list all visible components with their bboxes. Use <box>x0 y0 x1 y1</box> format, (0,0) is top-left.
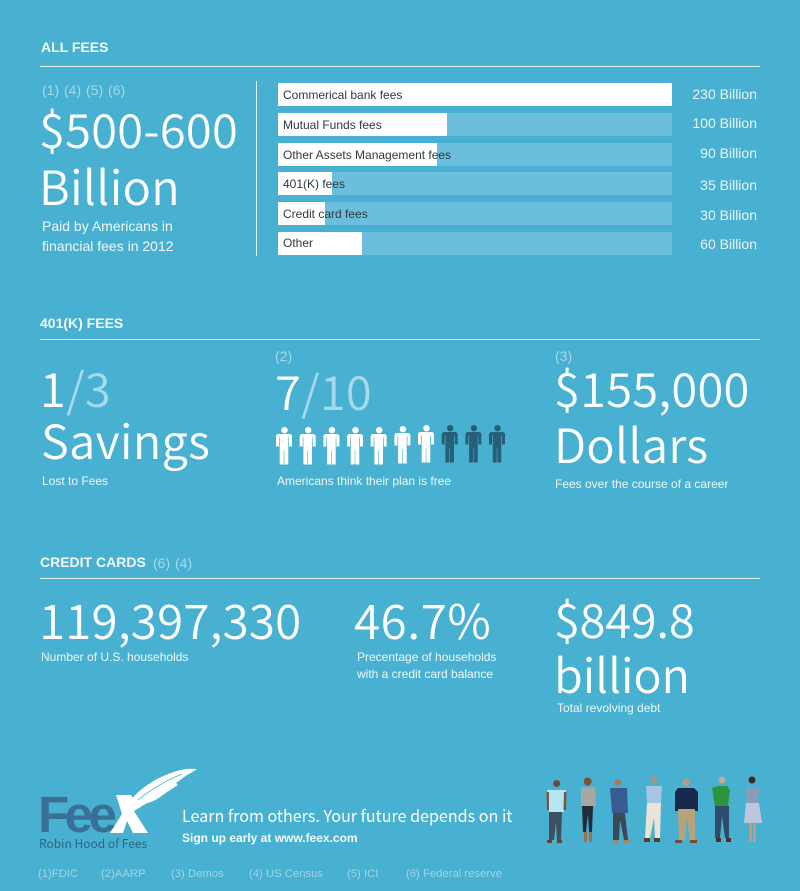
caption: with a credit card balance <box>357 667 493 681</box>
headline figure: $500-600 <box>39 93 238 162</box>
stat: revolving debt <box>554 583 694 715</box>
caption: financial fees in 2012 <box>42 238 174 254</box>
stat: share with balance <box>354 584 496 681</box>
bar: commercial bank fees: Commerical bank fees <box>283 88 402 102</box>
bar: 401(k) fees: 401(K) fees <box>283 177 345 191</box>
illustration: group of people <box>546 776 762 843</box>
call to action <box>182 803 512 845</box>
bar: commercial bank fees <box>278 83 672 106</box>
tagline: Robin Hood of Fees <box>39 835 147 852</box>
slogan: Learn from others. Your future depends on it <box>182 803 512 827</box>
unit: billion <box>554 638 690 707</box>
source 2: (2)AARP <box>101 868 146 880</box>
amount: $849.8 <box>554 583 694 652</box>
reference: (2) <box>275 348 292 364</box>
bar: other <box>278 232 672 255</box>
source 1: (1)FDIC <box>38 868 78 880</box>
heading: 401(k) fees: 401(K) FEES <box>40 315 123 331</box>
wordmark: fee: Fee <box>38 786 112 843</box>
amount: $155,000 <box>554 352 750 421</box>
section: 401(k) fees <box>40 315 760 491</box>
section: all fees <box>39 39 760 256</box>
stat: one third <box>40 352 210 488</box>
stat: households <box>39 584 301 664</box>
caption <box>357 650 496 681</box>
reference: (3) <box>555 348 572 364</box>
caption: Paid by Americans in <box>42 218 173 234</box>
source references: (1) (4) (5) (6) <box>42 82 125 98</box>
fraction: 7/10 <box>275 355 372 424</box>
logo: feex <box>38 768 197 852</box>
bar: other: Other <box>283 236 313 250</box>
stat: lifetime cost <box>554 348 750 491</box>
caption: Fees over the course of a career <box>555 477 728 491</box>
unit: Dollars <box>554 408 708 477</box>
value: 90 Billion <box>700 145 757 161</box>
sign up line: Sign up early at www.feex.com <box>182 831 358 845</box>
bar: credit card fees <box>278 202 672 225</box>
bar: other assets management fees: Other Assets Management fees <box>283 148 451 162</box>
person 3 <box>610 779 629 843</box>
bar: other assets management fees <box>278 143 672 166</box>
savings: Savings <box>41 404 210 473</box>
value: 30 Billion <box>700 207 757 223</box>
fraction: 1/3 <box>40 352 111 421</box>
caption: Americans think their plan is free <box>277 474 451 488</box>
person 6 <box>712 776 731 842</box>
caption: Total revolving debt <box>557 701 660 715</box>
source 4: (4) US Census <box>249 868 323 880</box>
person 4 <box>644 776 662 842</box>
bar: 401(k) fees <box>278 172 672 195</box>
stat: seven of ten <box>275 348 505 488</box>
person 7 <box>744 776 762 842</box>
section: credit cards <box>39 554 760 715</box>
source 5: (5) ICI <box>347 868 378 880</box>
source list <box>38 868 502 880</box>
value: 60 Billion <box>700 236 757 252</box>
value: 230 Billion <box>692 86 757 102</box>
caption: Number of U.S. households <box>41 650 188 664</box>
number: 46.7% <box>354 584 491 653</box>
source 6: (6) Federal reserve <box>406 868 502 880</box>
caption: Precentage of households <box>357 650 496 664</box>
headline unit: Billion <box>39 150 180 219</box>
caption <box>42 218 174 254</box>
bar: credit card fees: Credit card fees <box>283 207 368 221</box>
source references: (6) (4) <box>153 555 192 571</box>
person 5 <box>675 779 698 843</box>
person 2 <box>581 778 596 842</box>
number: 119,397,330 <box>39 584 301 653</box>
people pictogram <box>276 425 505 464</box>
icon: quill and x <box>110 768 197 833</box>
value: 35 Billion <box>700 177 757 193</box>
source 3: (3) Demos <box>171 868 224 880</box>
bar: mutual funds fees: Mutual Funds fees <box>283 118 382 132</box>
bar: mutual funds fees <box>278 113 672 136</box>
value: 100 Billion <box>692 115 757 131</box>
caption: Lost to Fees <box>42 474 108 488</box>
person 1 <box>546 780 566 843</box>
heading: all fees: ALL FEES <box>41 39 108 55</box>
heading: credit cards: CREDIT CARDS <box>40 554 146 570</box>
